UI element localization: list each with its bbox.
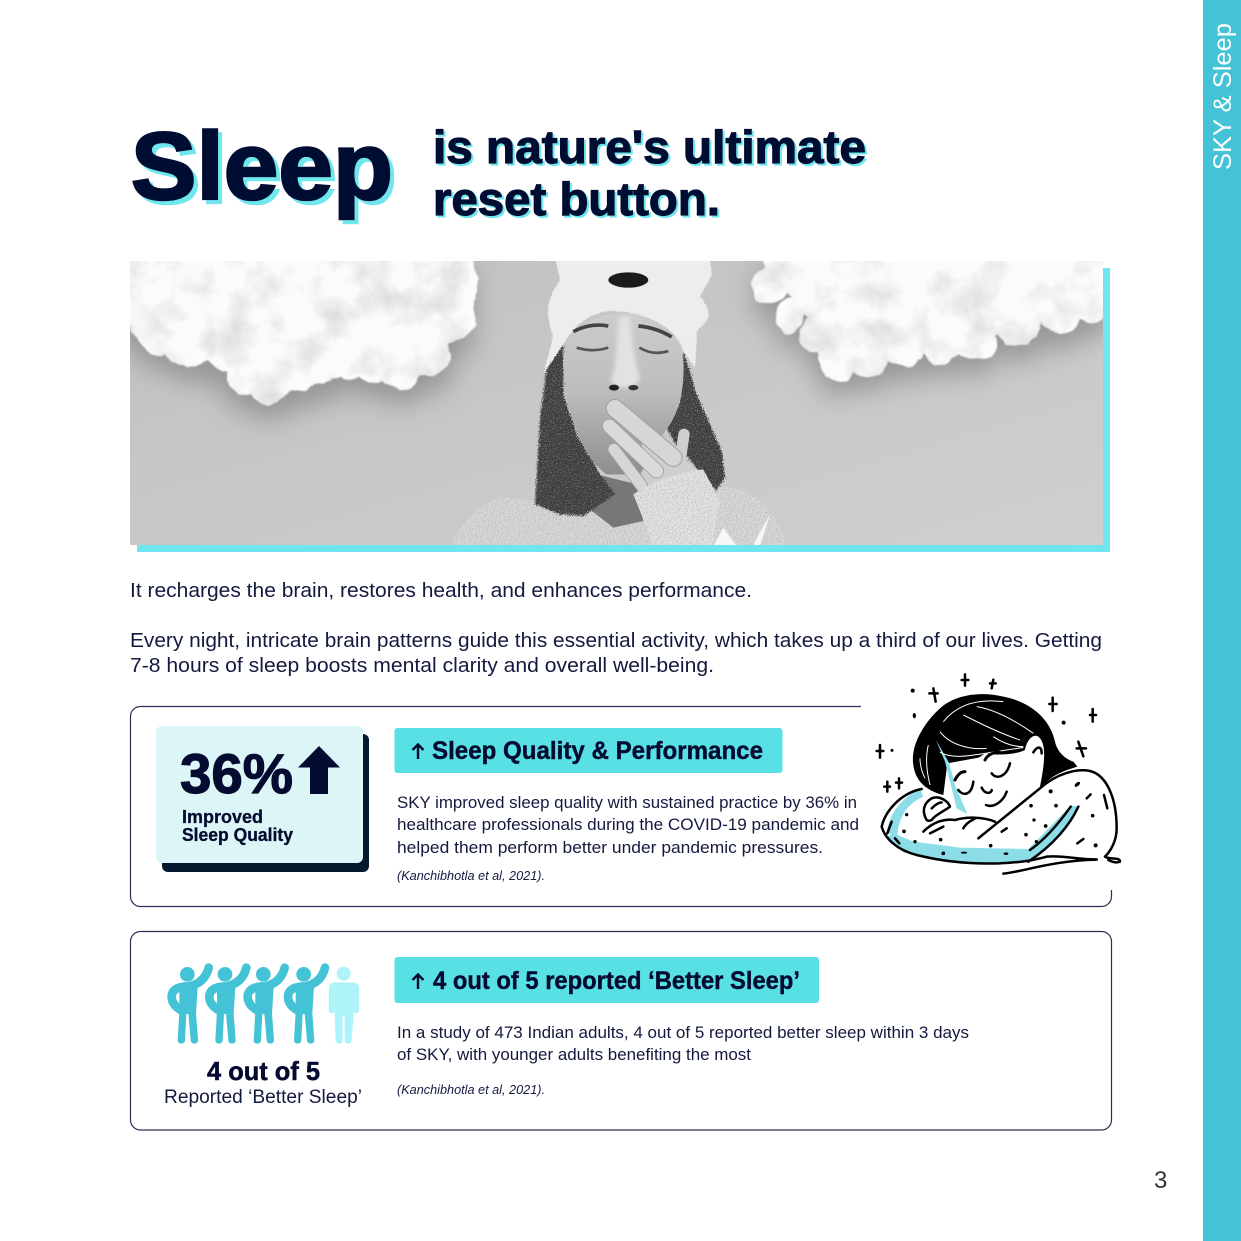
heading: 4 out of 5 better sleep [394, 957, 819, 1003]
heading: sleep quality and performance [394, 728, 782, 773]
body text: of SKY, with younger adults benefiting the most [397, 1046, 751, 1064]
title tagline: reset button. [433, 173, 720, 225]
sidebar tab [1203, 0, 1241, 1241]
intro text: 7-8 hours of sleep boosts mental clarity and overall well-being. [130, 655, 714, 677]
stat card: 36% [156, 726, 369, 872]
stat card: 36%: 36% [180, 742, 293, 805]
body text: healthcare professionals during the COVID-19 pandemic and [397, 816, 859, 834]
panel: better sleep [130, 932, 1112, 1130]
stat card: 36%: Improved [182, 806, 263, 827]
citation: (Kanchibhotla et al, 2021). [397, 868, 545, 883]
title [131, 113, 866, 225]
woman [452, 258, 788, 548]
stat: 4 out of 5: 4 out of 5 [207, 1056, 320, 1086]
stat card: 36%: Sleep Quality [182, 824, 294, 845]
illustration: sleeping girl on pillow [877, 674, 1120, 874]
page number: 3 [1154, 1167, 1167, 1194]
intro text: It recharges the brain, restores health, and enhances performance. [130, 580, 752, 602]
icon: up arrow [298, 746, 340, 794]
title tagline: is nature's ultimate [433, 121, 866, 173]
title word: Sleep: Sleep [131, 113, 393, 220]
title tagline [433, 121, 866, 225]
body text [397, 1024, 969, 1064]
stat: 4 out of 5: Reported ‘Better Sleep’ [164, 1087, 362, 1108]
stat: 4 out of 5 [164, 1056, 362, 1108]
body text [397, 794, 859, 857]
photo panel: yawning woman between clouds [110, 250, 1112, 552]
icon: people, 4 of 5 highlighted [172, 967, 359, 1044]
sidebar label: SKY & Sleep [1209, 23, 1237, 170]
citation: (Kanchibhotla et al, 2021). [397, 1082, 545, 1097]
body text: SKY improved sleep quality with sustained practice by 36% in [397, 794, 857, 812]
hand [642, 443, 652, 456]
intro text: Every night, intricate brain patterns guide this essential activity, which takes up a third of our lives. Getting [130, 630, 1102, 652]
heading: sleep quality and performance: Sleep Quality & Performance [432, 737, 763, 765]
heading: 4 out of 5 better sleep: 4 out of 5 reported ‘Better Sleep’ [433, 967, 800, 995]
panel: sleep quality [130, 706, 1112, 906]
body text: helped them perform better under pandemic pressures. [397, 839, 823, 857]
intro text [130, 580, 1102, 677]
body text: In a study of 473 Indian adults, 4 out of 5 reported better sleep within 3 days [397, 1024, 969, 1042]
